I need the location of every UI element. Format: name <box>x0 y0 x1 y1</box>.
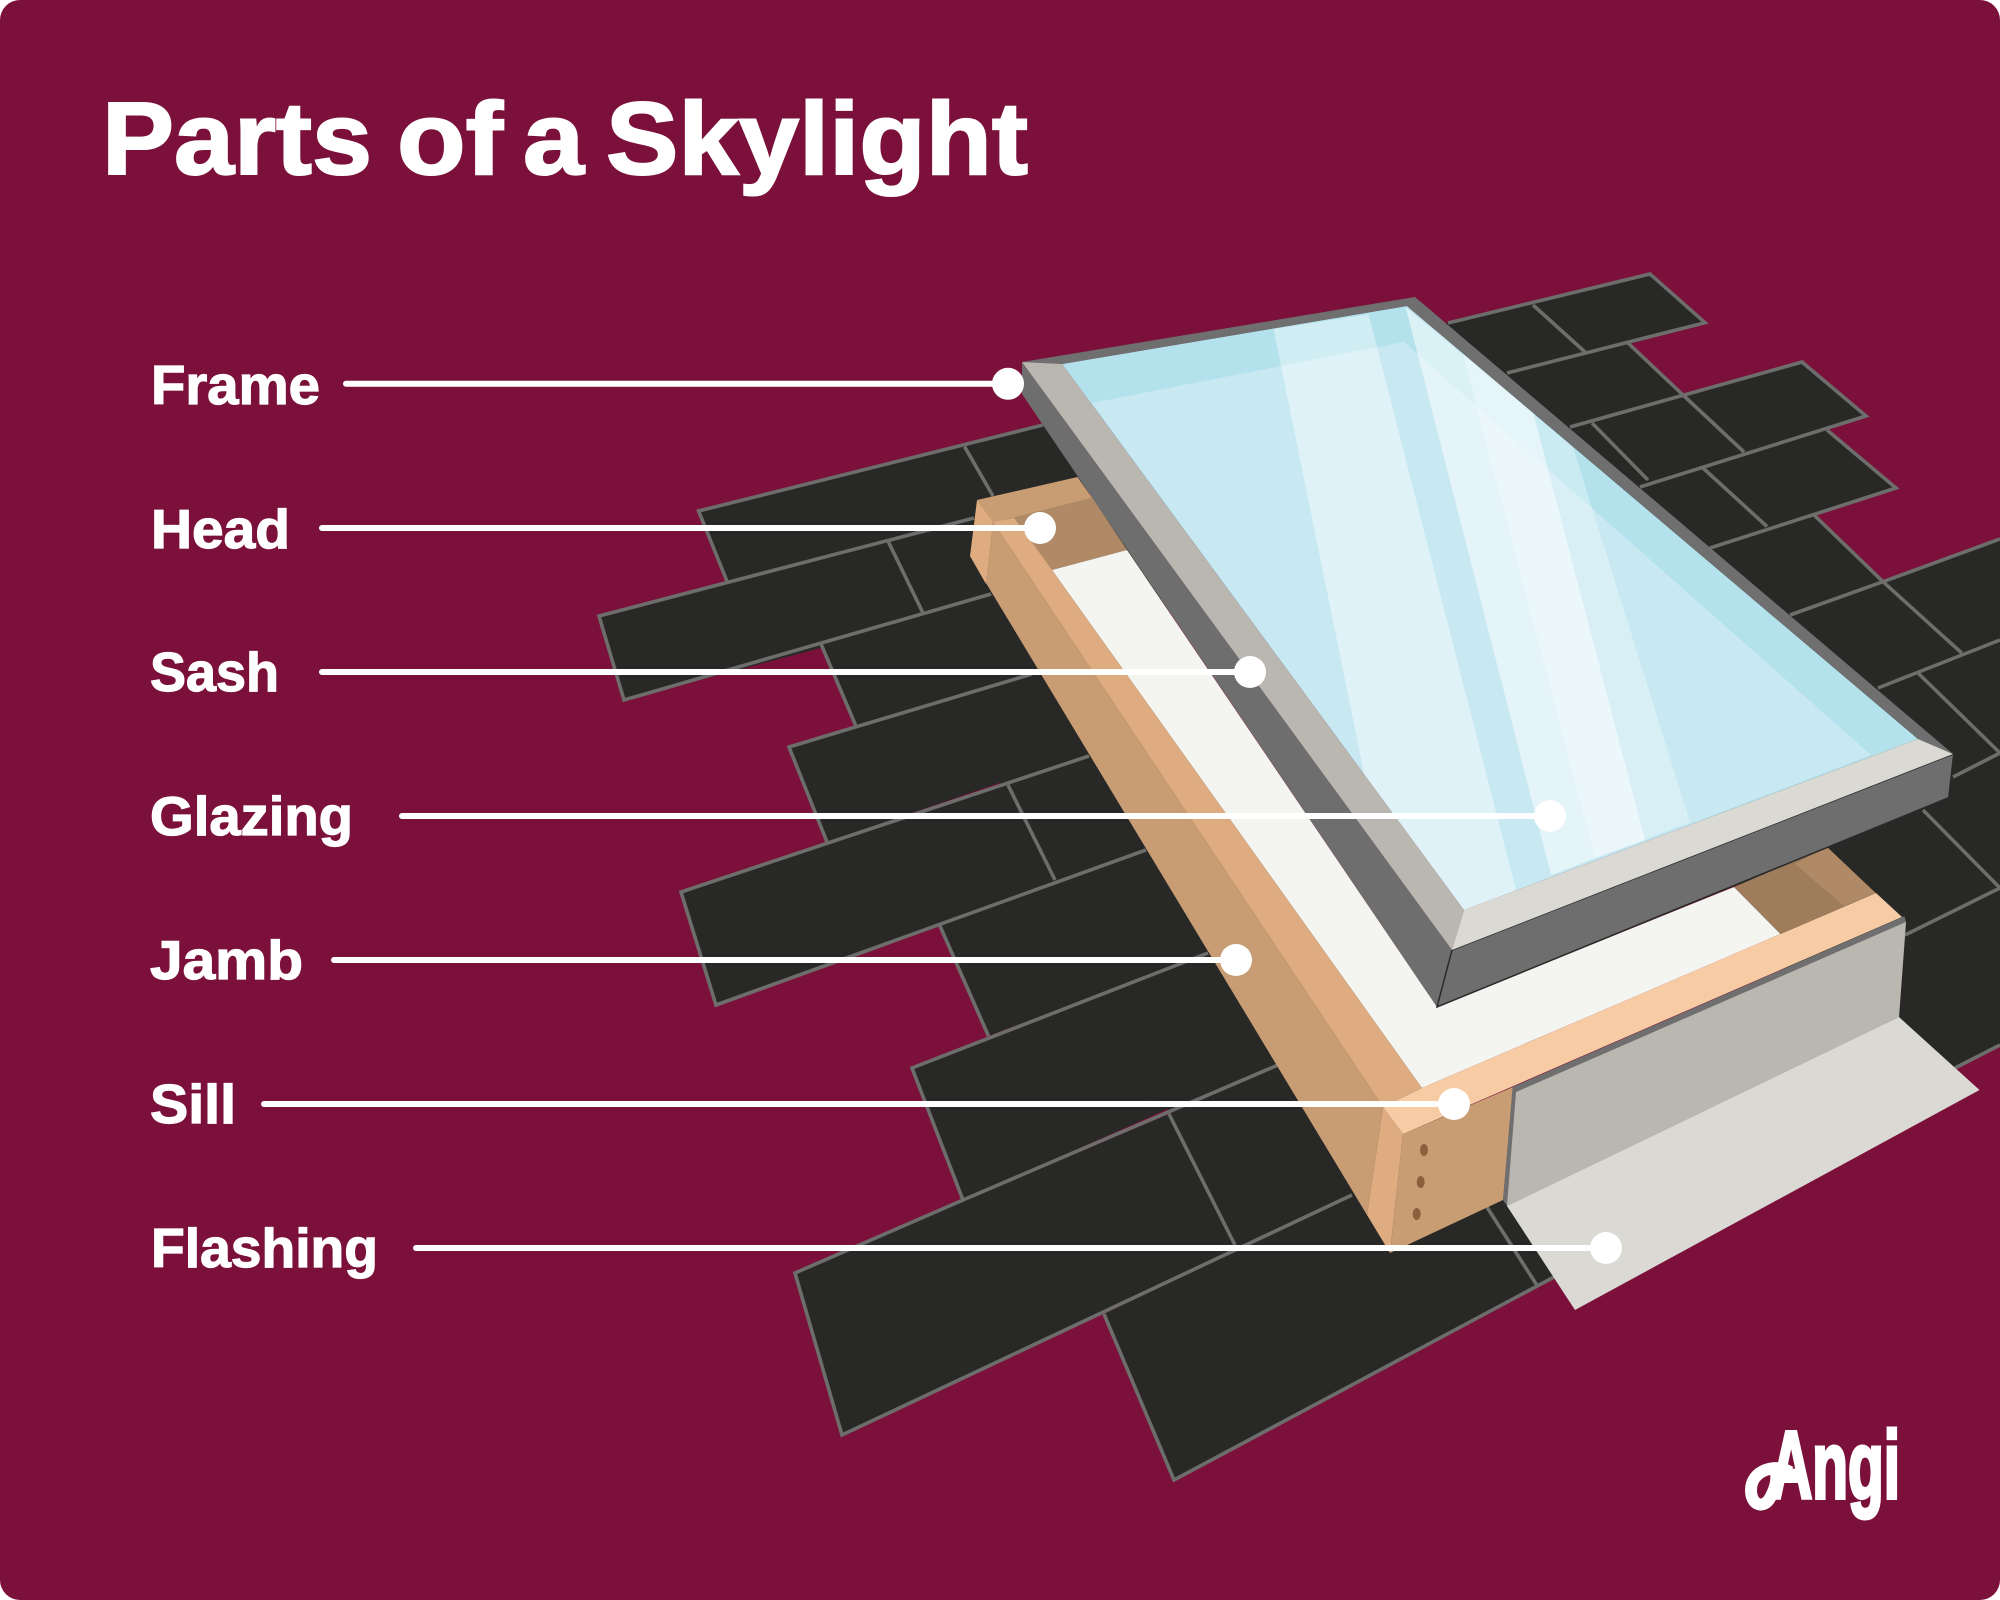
flashing <box>1503 916 1980 1310</box>
white sash well <box>1052 550 1780 1088</box>
wooden curb: head <box>977 477 1127 570</box>
label: Glazing <box>150 785 1566 847</box>
roof shingles <box>599 274 2000 1480</box>
wooden curb: sill <box>1367 893 1902 1253</box>
title <box>102 81 1028 196</box>
wooden curb: jamb <box>970 500 1422 1215</box>
label: Frame <box>151 354 1024 416</box>
title: Skylight <box>606 81 1028 196</box>
title: a <box>523 81 585 196</box>
label: Head <box>151 498 1056 560</box>
label: Sill: Sill <box>150 1073 236 1135</box>
logo: Angi: Angi <box>1770 1412 1900 1519</box>
label: Sill <box>150 1073 1470 1135</box>
logo: Angi <box>1751 1412 1900 1519</box>
label: Flashing: Flashing <box>151 1217 378 1279</box>
skylight frame: bevels <box>1022 297 1953 950</box>
label: Head: Head <box>151 498 290 560</box>
label: Glazing: Glazing <box>150 785 353 847</box>
label: Frame: Frame <box>151 354 320 416</box>
skylight frame outer sides <box>1022 362 1953 1007</box>
far-end head wood <box>1734 847 1876 934</box>
title: Parts <box>102 81 372 196</box>
label: Sash: Sash <box>150 641 279 703</box>
label: Sash <box>150 641 1266 703</box>
glazing <box>1062 306 1918 950</box>
label: Jamb: Jamb <box>150 929 303 991</box>
label: Flashing <box>151 1217 1622 1279</box>
label: Jamb <box>150 929 1252 991</box>
title: of <box>397 81 504 196</box>
